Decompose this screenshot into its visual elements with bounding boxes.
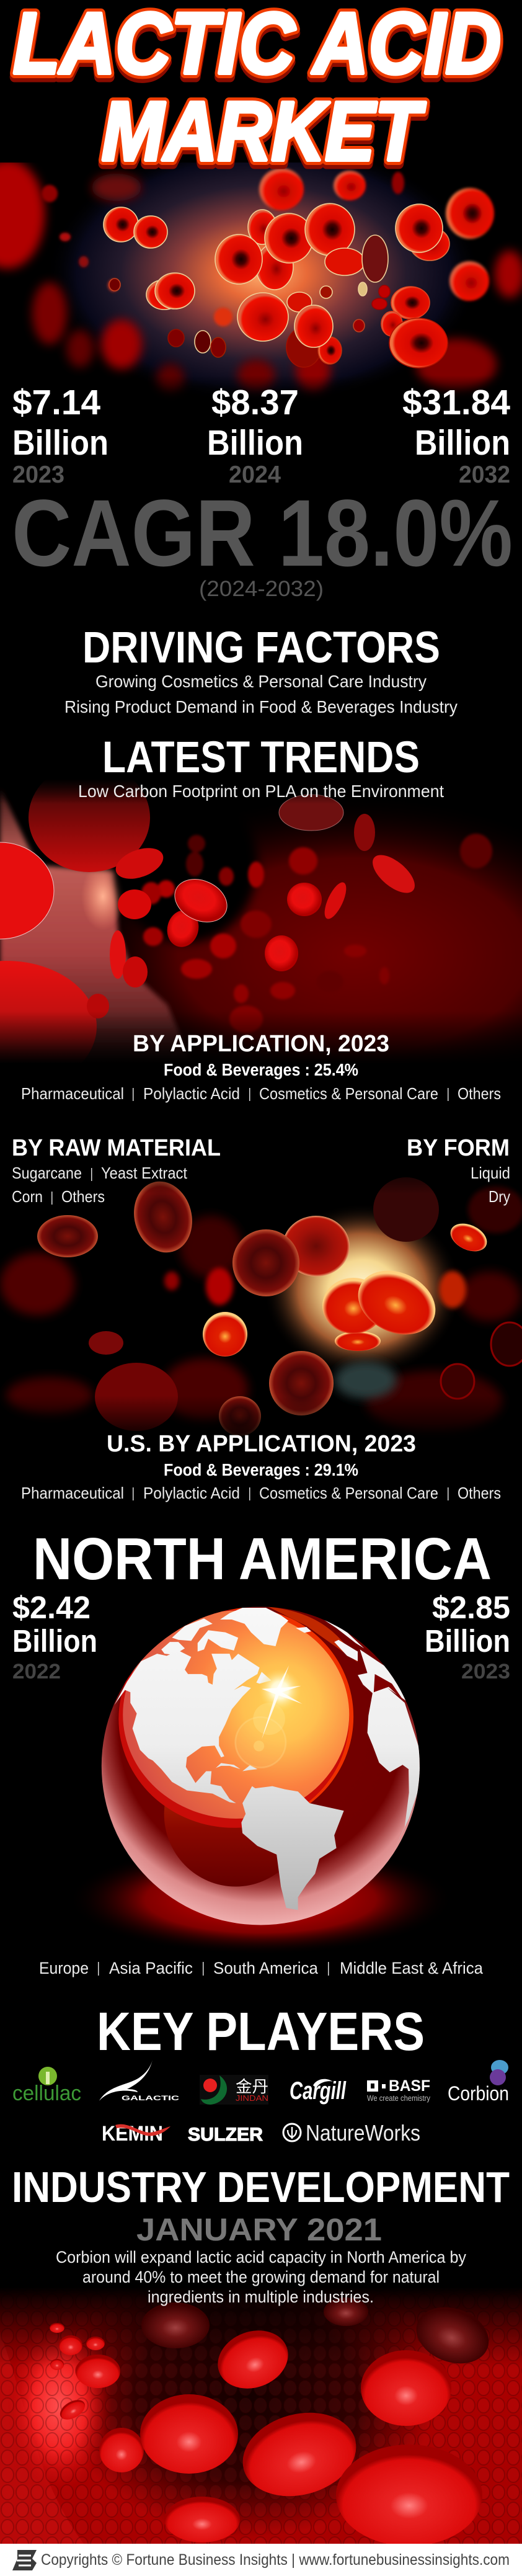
logo: cellulac: cellulac bbox=[12, 2082, 81, 2105]
footer bbox=[0, 2544, 522, 2576]
text: U.S. application categories bbox=[21, 1484, 501, 1502]
text: development description: around 40% to meet the growing demand for natural bbox=[82, 2268, 440, 2286]
stat: North America 2023: $2.85 bbox=[432, 1590, 510, 1625]
text: top application share: Food & Beverages : 25.4% bbox=[164, 1060, 358, 1079]
text: driving factor 2: Rising Product Demand in Food & Beverages Industry bbox=[64, 697, 458, 716]
text: U.S. top application share: Food & Beverages : 29.1% bbox=[164, 1460, 358, 1479]
text: U.S. application categories: Pharmaceutical bbox=[21, 1484, 124, 1502]
date: january 2021: JANUARY 2021 bbox=[136, 2212, 382, 2247]
heading: north america: NORTH AMERICA bbox=[33, 1526, 492, 1592]
text: application categories: Others bbox=[458, 1084, 501, 1103]
heading: latest trends: LATEST TRENDS bbox=[102, 733, 420, 782]
stat: North America 2022: 2022 bbox=[12, 1660, 61, 1683]
text: raw materials: Yeast Extract bbox=[101, 1164, 188, 1182]
text: forms bbox=[471, 1164, 510, 1206]
stat: North America 2023: Billion bbox=[425, 1623, 510, 1659]
text: other regions bbox=[39, 1959, 484, 1977]
text: other regions: South America bbox=[213, 1959, 319, 1977]
text: other regions: Europe bbox=[39, 1959, 89, 1977]
logo: corbion bbox=[448, 2060, 509, 2105]
text: application categories bbox=[21, 1084, 501, 1103]
logo: cargill: Cargill bbox=[290, 2077, 347, 2105]
CAGR period: (2024-2032) bbox=[199, 577, 324, 601]
logo: jindan bbox=[200, 2074, 268, 2105]
text: driving factor 1: Growing Cosmetics & Personal Care Industry bbox=[95, 672, 427, 691]
text: raw materials: Others bbox=[61, 1187, 105, 1206]
stat: 2032 bbox=[402, 383, 510, 488]
stat: 2032: $31.84 bbox=[402, 383, 510, 422]
icon: globe bbox=[88, 1607, 433, 1949]
stat: 2023: Billion bbox=[12, 423, 108, 463]
text: other regions: Asia Pacific bbox=[109, 1959, 193, 1977]
text: application categories: Polylactic Acid bbox=[143, 1084, 240, 1103]
title line: MARKET: MARKET bbox=[102, 84, 425, 178]
text: application categories: Cosmetics & Personal Care bbox=[259, 1084, 438, 1103]
title bbox=[13, 0, 501, 182]
image: trends blood cells bbox=[0, 782, 522, 1061]
text: forms: Dry bbox=[489, 1187, 510, 1206]
logo: BASF: BASF bbox=[389, 2077, 430, 2095]
title line: MARKET: MARKET bbox=[102, 88, 425, 182]
text: U.S. application categories: Cosmetics & Personal Care bbox=[259, 1484, 438, 1502]
text: application categories: Pharmaceutical bbox=[21, 1084, 124, 1103]
logo: sulzer: SULZER bbox=[188, 2124, 263, 2145]
stat: North America 2022: Billion bbox=[12, 1623, 97, 1659]
text: raw materials: Corn bbox=[12, 1187, 43, 1206]
text: raw materials bbox=[12, 1164, 188, 1206]
image: hero blood cells bbox=[0, 163, 522, 396]
icon: Fortune Business Insights logo bbox=[12, 2550, 37, 2570]
text: U.S. application categories: Others bbox=[458, 1484, 501, 1502]
text: development description: ingredients in multiple industries. bbox=[148, 2288, 374, 2306]
text: other regions: Middle East & Africa bbox=[340, 1959, 484, 1977]
stat: 2032: Billion bbox=[415, 423, 510, 463]
logo: jindan: JINDAN bbox=[236, 2093, 268, 2103]
logo: jindan: 金丹 bbox=[236, 2074, 268, 2097]
heading: by application: BY APPLICATION, 2023 bbox=[133, 1031, 389, 1057]
logo: BASF: We create chemistry bbox=[367, 2093, 430, 2103]
image: segment blood cells bbox=[0, 1177, 522, 1436]
text: latest trend: Low Carbon Footprint on PLA on the Environment bbox=[78, 782, 444, 801]
logo: cellulac bbox=[12, 2067, 81, 2105]
stat: 2024: Billion bbox=[207, 423, 303, 463]
text: development description bbox=[56, 2248, 466, 2306]
stat: 2032: 2032 bbox=[459, 461, 510, 488]
logo: corbion: Corbion bbox=[448, 2082, 509, 2105]
heading: by form: BY FORM bbox=[407, 1135, 510, 1161]
text: development description: Corbion will expand lactic acid capacity in North America by bbox=[56, 2248, 466, 2266]
stat: North America 2022: $2.42 bbox=[12, 1590, 91, 1625]
heading: by raw material: BY RAW MATERIAL bbox=[12, 1135, 221, 1161]
logo: BASF bbox=[367, 2077, 430, 2103]
logo: galactic: GALACTIC bbox=[122, 2095, 179, 2102]
heading: U.S. by application: U.S. BY APPLICATION, 2023 bbox=[107, 1431, 416, 1457]
stat: 2024 bbox=[207, 383, 303, 488]
logo: kemin: KEMIN bbox=[102, 2122, 163, 2146]
text: raw materials: Sugarcane bbox=[12, 1164, 82, 1182]
title line: MARKET: MARKET bbox=[102, 84, 425, 178]
stat: North America 2022 bbox=[12, 1590, 97, 1683]
stat: 2024: $8.37 bbox=[211, 383, 299, 422]
text: U.S. application categories: Polylactic Acid bbox=[143, 1484, 240, 1502]
stat: 2023: $7.14 bbox=[12, 383, 100, 422]
stat: North America 2023 bbox=[425, 1590, 510, 1683]
stat: North America 2023: 2023 bbox=[461, 1660, 510, 1683]
stat: 2023: 2023 bbox=[12, 461, 64, 488]
stat: 2023 bbox=[12, 383, 108, 488]
heading: driving factors: DRIVING FACTORS bbox=[82, 623, 440, 672]
stat: 2024: 2024 bbox=[229, 461, 281, 488]
logo: galactic bbox=[99, 2060, 179, 2102]
heading: key players: KEY PLAYERS bbox=[97, 2002, 425, 2062]
logo: natureworks: NatureWorks bbox=[306, 2120, 420, 2146]
text: forms: Liquid bbox=[471, 1164, 510, 1182]
image: vessel blood cells bbox=[0, 2291, 522, 2544]
